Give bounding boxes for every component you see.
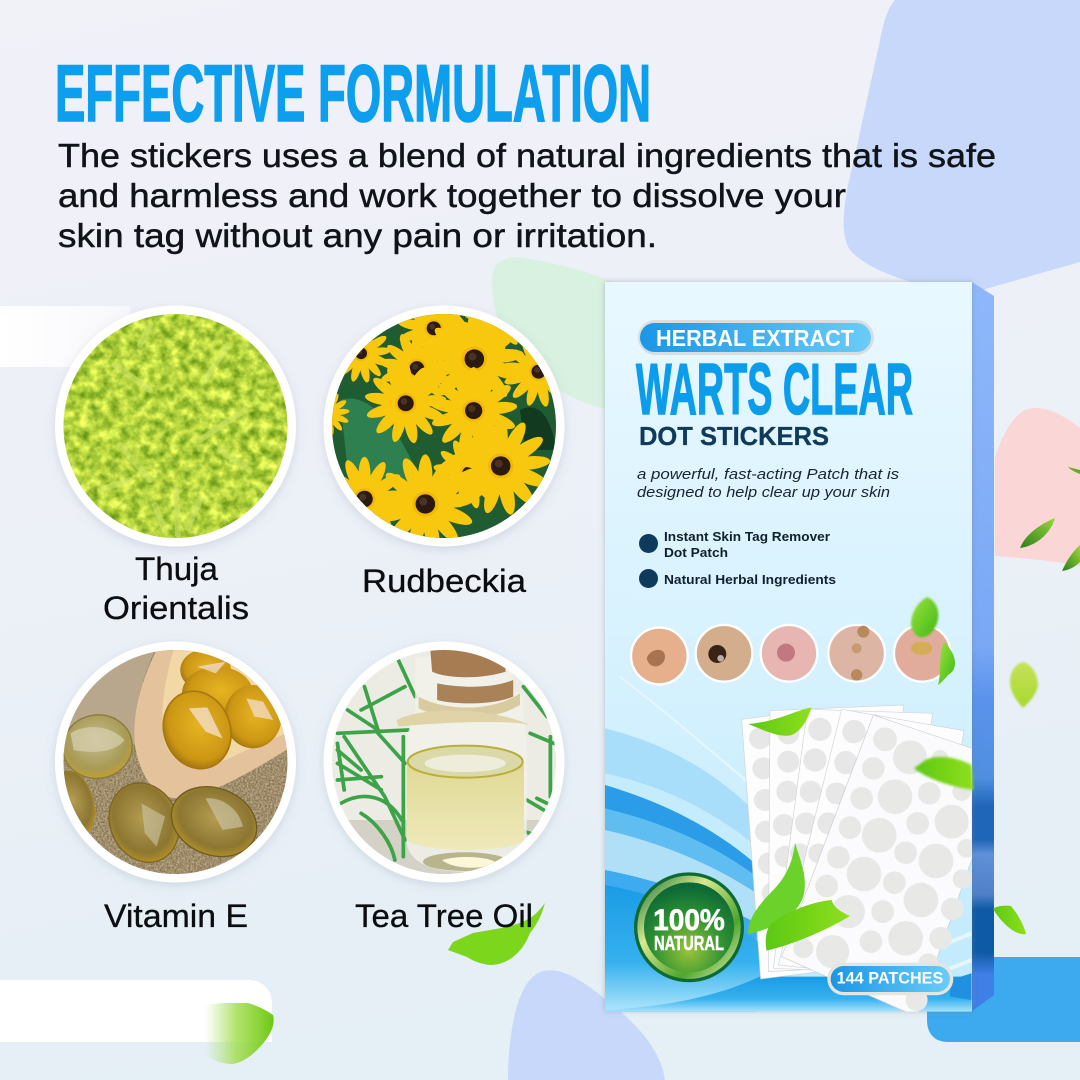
vitamin E photo circle bbox=[45, 642, 297, 882]
bullet list: Instant Skin Tag Remover bbox=[664, 529, 830, 544]
label: Tea Tree Oil: Tea Tree Oil bbox=[355, 898, 533, 934]
skin condition photos bbox=[631, 625, 951, 684]
tea tree oil photo circle bbox=[324, 642, 564, 882]
decorative bar: lower left white bbox=[0, 980, 272, 1042]
floating leaf: yellow green bbox=[1010, 662, 1038, 708]
label: Thuja Orientalis: Thuja bbox=[135, 551, 218, 587]
badge: 100% natural: 100% bbox=[653, 904, 725, 937]
ingredient: Vitamin E bbox=[45, 642, 297, 934]
badge: 144 patches bbox=[827, 963, 953, 995]
blurred leaf bbox=[766, 900, 850, 951]
label: Vitamin E: Vitamin E bbox=[104, 898, 248, 934]
small leaf on skin photos bbox=[938, 642, 955, 685]
leaf at lower left bar bbox=[205, 1003, 274, 1064]
badge: 100% natural bbox=[634, 872, 744, 982]
leaf at sheet right bbox=[914, 757, 973, 790]
decorative bar: upper left white bbox=[0, 306, 130, 367]
badge: herbal extract: HERBAL EXTRACT bbox=[656, 325, 854, 351]
ingredient: Thuja Orientalis bbox=[55, 306, 296, 626]
box front panel bbox=[605, 282, 972, 1011]
large veined leaf bbox=[748, 843, 805, 934]
intro paragraph: skin tag without any pain or irritation. bbox=[58, 217, 657, 254]
intro paragraph: and harmless and work together to dissolve your bbox=[58, 177, 846, 214]
floating leaf: on pink right bbox=[1062, 545, 1080, 571]
rudbeckia photo circle bbox=[321, 306, 567, 552]
bullet list: Dot Patch bbox=[664, 545, 728, 560]
patch sheets bbox=[741, 704, 972, 1012]
floating leaf: on pink left bbox=[1020, 518, 1055, 548]
box side panel bbox=[972, 282, 994, 1011]
intro paragraph bbox=[58, 137, 996, 254]
thuja photo circle bbox=[55, 306, 296, 546]
ingredient: Tea Tree Oil bbox=[324, 642, 564, 934]
leaf at sheet top bbox=[748, 707, 812, 736]
label: Rudbeckia: Rudbeckia bbox=[362, 563, 526, 599]
label: Thuja Orientalis bbox=[103, 551, 249, 626]
badge: herbal extract bbox=[638, 320, 874, 355]
decorative shape: pink blob bbox=[995, 408, 1080, 566]
bullet list: Natural Herbal Ingredients bbox=[664, 572, 836, 587]
leaf on skin photos bbox=[911, 597, 938, 637]
sheet 3 bbox=[773, 709, 933, 973]
background swooshes bbox=[605, 677, 972, 1013]
decorative shape: green blob bbox=[492, 257, 620, 412]
ingredient: Rudbeckia bbox=[321, 306, 567, 592]
leaf behind Tea Tree Oil label bbox=[448, 903, 545, 965]
label: Thuja Orientalis: Orientalis bbox=[103, 590, 249, 626]
sheet 4 bbox=[778, 709, 964, 980]
decorative shape: bottom blue blob bbox=[508, 970, 665, 1080]
product description: a powerful, fast-acting Patch that is bbox=[637, 466, 900, 483]
product description: designed to help clear up your skin bbox=[637, 484, 890, 501]
floating leaf: green bbox=[993, 906, 1026, 934]
sheet 2 bbox=[768, 705, 904, 972]
sheet 5 front bbox=[781, 715, 972, 1012]
floating leaf: on pink top bbox=[1068, 467, 1080, 474]
bullet list bbox=[639, 529, 836, 588]
sheet 1 bbox=[741, 716, 816, 980]
badge: 144 patches: 144 PATCHES bbox=[837, 970, 943, 988]
intro paragraph: The stickers uses a blend of natural ingredients that is safe bbox=[58, 137, 996, 174]
product subtitle: DOT STICKERS bbox=[639, 421, 829, 451]
product box bbox=[605, 282, 1007, 1017]
lower box artwork bbox=[605, 677, 1007, 1017]
badge: 100% natural: NATURAL bbox=[654, 932, 724, 955]
product description bbox=[637, 466, 900, 501]
decorative shape: top right blue blob bbox=[844, 0, 1080, 292]
decorative shape: bottom blue rectangle bbox=[927, 957, 1080, 1042]
